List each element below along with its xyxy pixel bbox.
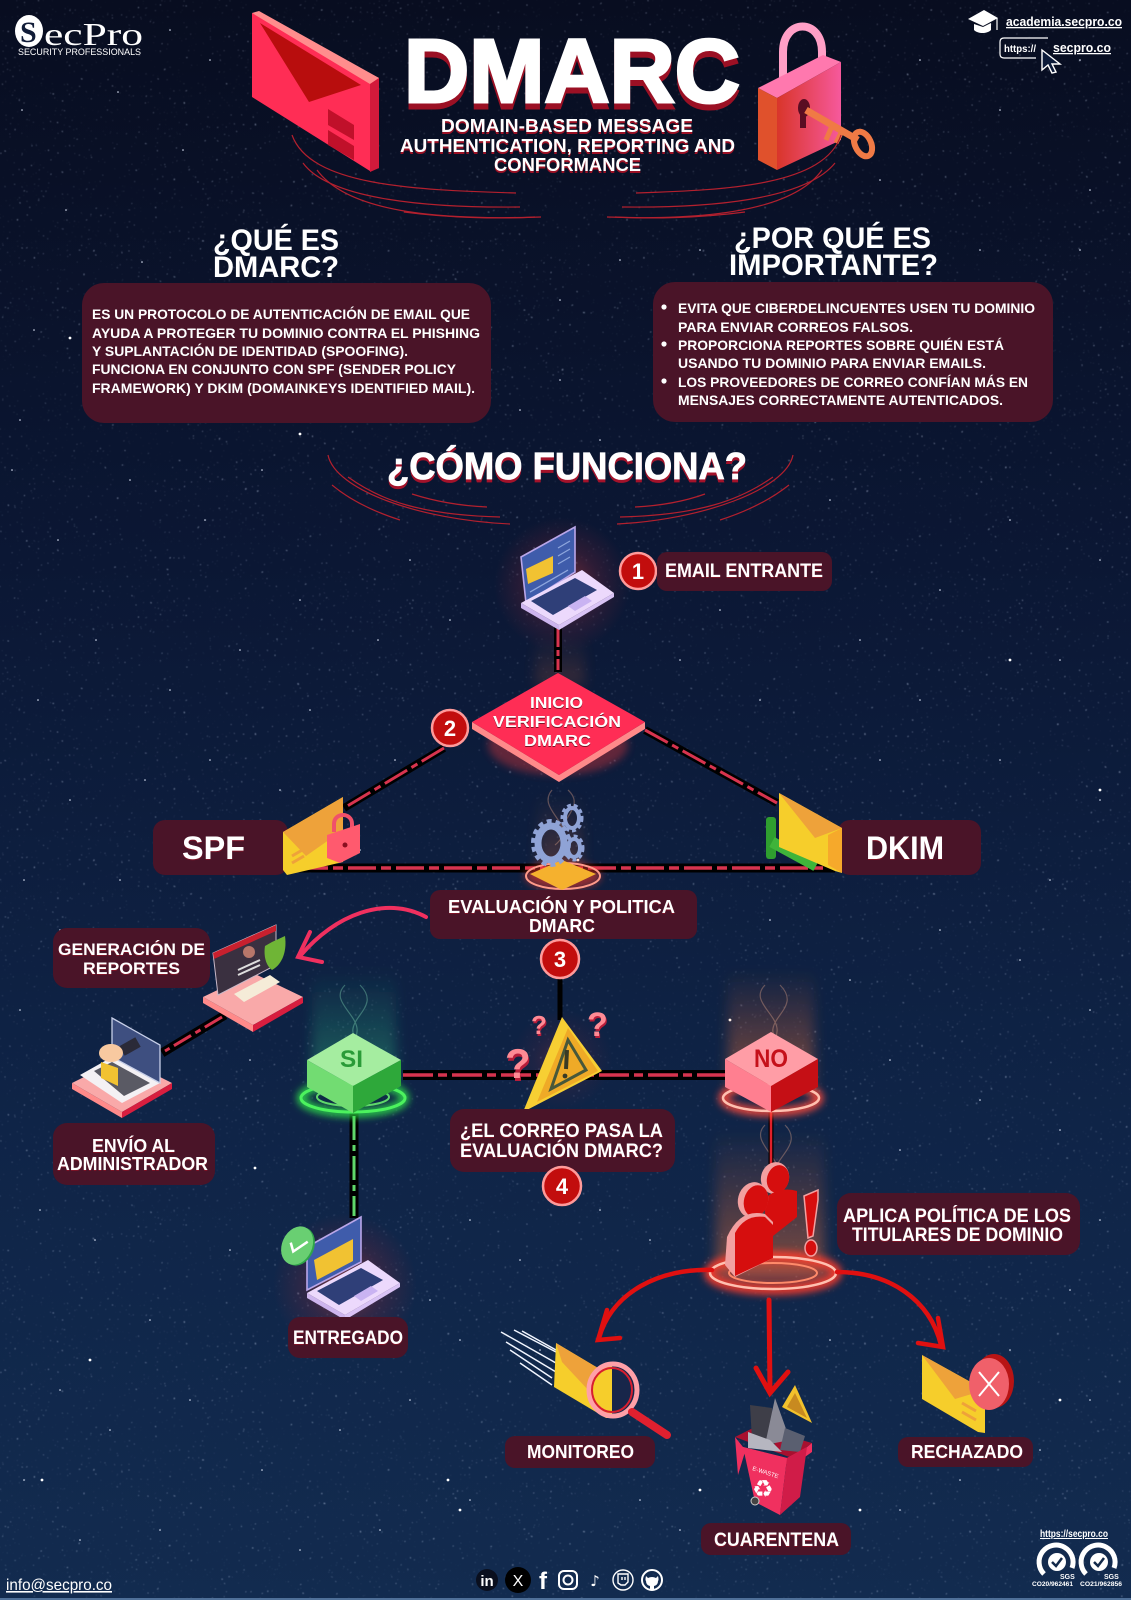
bullets — [661, 304, 667, 384]
heading: por que es importante — [729, 221, 938, 282]
glows — [273, 517, 824, 1357]
panel text: LOS PROVEEDORES DE CORREO CONFÍAN MÁS EN — [678, 374, 1028, 390]
panel text: MENSAJES CORRECTAMENTE AUTENTICADOS. — [678, 392, 1003, 408]
icon: x: X — [513, 1573, 524, 1590]
arrow: to report — [298, 908, 426, 962]
icon: quarantine bin — [735, 1385, 812, 1515]
connector: no to policy — [768, 1112, 774, 1170]
icon: instagram — [559, 1571, 577, 1589]
icon: cursor — [1042, 50, 1060, 73]
panel: por que es importante — [653, 282, 1053, 422]
panel text: PARA ENVIAR CORREOS FALSOS. — [678, 319, 913, 335]
heading: que es dmarc — [213, 223, 339, 284]
link box: https: https:// — [1004, 43, 1036, 55]
link: https secpro: https://secpro.co — [1040, 1529, 1108, 1540]
panel text: PROPORCIONA REPORTES SOBRE QUIÉN ESTÁ — [678, 337, 1004, 353]
icon: rejected envelope — [922, 1354, 1014, 1433]
badge 4 — [543, 1167, 581, 1205]
panel text: USANDO TU DOMINIO PARA ENVIAR EMAILS. — [678, 355, 986, 371]
label: aplica politica — [837, 1193, 1080, 1255]
label: cuarentena — [701, 1523, 851, 1555]
badge 3 — [541, 940, 579, 978]
logo tagline: SECURITY PROFESSIONALS — [18, 47, 141, 58]
heading: como funciona: ¿CÓMO FUNCIONA? — [387, 444, 747, 488]
icon: si cube: SI — [340, 1046, 363, 1073]
logo: SecPro — [15, 15, 143, 58]
icon: linkedin — [476, 1569, 498, 1591]
connector: laptop to diamond — [554, 625, 562, 672]
label text: GENERACIÓN DE — [58, 940, 205, 959]
label text: ENVÍO AL — [92, 1135, 175, 1156]
seal 2: SGS — [1104, 1574, 1119, 1581]
panel text: FRAMEWORK) Y DKIM (DOMAINKEYS IDENTIFIED MAIL). — [92, 380, 475, 396]
heading line 2: DMARC? — [213, 251, 339, 284]
label: evaluacion y politica — [430, 890, 697, 939]
icon: delivered laptop — [307, 1217, 400, 1320]
badge 4: 4 — [556, 1174, 569, 1199]
label text — [448, 896, 675, 936]
footer email: info@secpro.co — [6, 1577, 112, 1594]
logo wordmark: ecPro — [44, 16, 143, 52]
connector: diamond to dkim — [645, 730, 777, 803]
seal 1: SGS — [1060, 1574, 1075, 1581]
panel text: FUNCIONA EN CONJUNTO CON SPF (SENDER POLICY — [92, 361, 457, 377]
label: spf: SPF — [182, 830, 245, 866]
label: email entrante — [657, 552, 832, 591]
panel text — [92, 305, 480, 396]
icon: warning with question marks — [505, 1006, 608, 1112]
icon: x — [505, 1567, 531, 1593]
icon: incoming laptop — [521, 527, 614, 630]
diamond text — [493, 695, 621, 750]
label: cuarentena: CUARENTENA — [714, 1530, 839, 1551]
connector: si to delivered — [350, 1113, 358, 1218]
panel text: AYUDA A PROTEGER TU DOMINIO CONTRA EL PHISHING — [92, 325, 480, 341]
label: email entrante: EMAIL ENTRANTE — [665, 561, 823, 582]
icon: facebook: f — [539, 1568, 548, 1595]
icon: domain owners — [709, 1159, 837, 1290]
icon: check badge — [275, 1221, 321, 1271]
subtitle line 3: CONFORMANCE — [494, 155, 641, 175]
diamond text: VERIFICACIÓN — [493, 712, 621, 731]
icon: si cube — [301, 1033, 405, 1113]
diamond text: INICIO — [530, 695, 583, 712]
icon: linkedin: in — [480, 1573, 494, 1590]
label text — [460, 1121, 663, 1162]
swirl wisps — [340, 790, 791, 1195]
question marks — [505, 1006, 608, 1087]
label text: REPORTES — [83, 959, 180, 978]
label text: APLICA POLÍTICA DE LOS — [843, 1205, 1071, 1227]
connector: spf to dkim — [289, 864, 835, 872]
logo mark: S — [20, 16, 37, 49]
label: dkim — [838, 820, 981, 875]
heading line 1: ¿QUÉ ES — [213, 223, 339, 257]
label text: EVALUACIÓN DMARC? — [460, 1140, 663, 1162]
label text — [57, 1135, 208, 1174]
icon: padlock with key — [758, 26, 876, 170]
seal 2: CO21/962856 — [1080, 1582, 1123, 1588]
icon: github — [642, 1570, 662, 1590]
heading line 1: ¿POR QUÉ ES — [734, 221, 931, 255]
question marks: ? — [587, 1006, 608, 1044]
diamond: inicio verificacion dmarc — [472, 673, 645, 782]
icon: gears — [525, 805, 601, 890]
label text: EVALUACIÓN Y POLITICA — [448, 896, 675, 917]
icon: quarantine bin: E-WASTE — [751, 1466, 779, 1480]
badge 1 — [620, 553, 656, 589]
label: entregado: ENTREGADO — [293, 1328, 403, 1349]
icon: quarantine bin: ♻ — [752, 1475, 774, 1503]
label text: DMARC — [529, 916, 595, 936]
label: monitoreo: MONITOREO — [527, 1442, 634, 1462]
social icons — [476, 1567, 662, 1595]
seal 2 — [1080, 1545, 1123, 1588]
decorative arcs under title — [292, 135, 841, 218]
label text — [58, 940, 205, 978]
label text: TITULARES DE DOMINIO — [852, 1225, 1063, 1246]
seal 1: CO20/962461 — [1032, 1582, 1074, 1588]
question marks: ? — [531, 1010, 547, 1040]
label: dkim: DKIM — [866, 830, 944, 866]
subtitle — [400, 116, 735, 175]
arrow: to rechazado — [837, 1272, 943, 1347]
badge 1: 1 — [632, 559, 644, 584]
label text: ¿EL CORREO PASA LA — [460, 1121, 663, 1142]
label: el correo pasa — [450, 1109, 675, 1172]
panel text: EVITA QUE CIBERDELINCUENTES USEN TU DOMINIO — [678, 300, 1035, 316]
badge 2 — [432, 710, 468, 746]
link box: https — [1000, 38, 1048, 58]
icon: no cube: NO — [754, 1045, 788, 1073]
panel: que es dmarc — [82, 283, 491, 423]
heading line 2: IMPORTANTE? — [729, 249, 938, 282]
connector: diamond to spf — [344, 748, 444, 808]
icon: admin laptop — [72, 1018, 172, 1118]
icon: twitch — [613, 1570, 633, 1590]
seal 1 — [1032, 1545, 1075, 1588]
decorative arcs under heading — [328, 455, 793, 524]
panel text: Y SUPLANTACIÓN DE IDENTIDAD (SPOOFING). — [92, 342, 408, 359]
icon: spf envelope with lock — [283, 797, 360, 875]
icon: dkim envelope with key — [766, 793, 842, 873]
link: secpro.co: secpro.co — [1053, 41, 1111, 55]
panel text — [678, 300, 1035, 408]
label: generacion de reportes — [53, 928, 210, 988]
connector: report to admin — [162, 1015, 225, 1053]
icon: report laptop — [203, 925, 303, 1032]
label: spf — [153, 820, 288, 875]
label text — [843, 1205, 1071, 1246]
label: rechazado — [898, 1437, 1033, 1467]
certifications — [1032, 1529, 1123, 1588]
icon: red envelope — [252, 11, 379, 172]
icon: graduation cap — [968, 10, 998, 33]
label: envio al administrador — [53, 1123, 215, 1185]
label: rechazado: RECHAZADO — [911, 1442, 1023, 1462]
badge 3: 3 — [554, 947, 566, 972]
question marks: ? — [505, 1040, 531, 1087]
label: entregado — [288, 1317, 408, 1358]
panel text: ES UN PROTOCOLO DE AUTENTICACIÓN DE EMAIL QUE — [92, 305, 470, 322]
arrow: to monitoreo — [598, 1270, 712, 1340]
title: DMARC: DMARC — [404, 22, 740, 122]
icon: no cube — [723, 1032, 819, 1112]
subtitle line 2: AUTHENTICATION, REPORTING AND — [400, 136, 735, 156]
diamond text: DMARC — [524, 733, 592, 750]
arrow: to cuarentena — [756, 1300, 788, 1393]
link: academia.secpro.co: academia.secpro.co — [1006, 14, 1122, 29]
badge 2: 2 — [444, 716, 456, 741]
icon: tiktok: ♪ — [590, 1572, 600, 1590]
connector: si to no — [403, 1070, 725, 1080]
label text: ADMINISTRADOR — [57, 1154, 208, 1174]
icon: monitoreo envelope with magnifier — [501, 1330, 667, 1435]
connector: badge 3 to warning — [558, 978, 562, 1020]
label: monitoreo — [505, 1436, 655, 1468]
subtitle line 1: DOMAIN-BASED MESSAGE — [441, 116, 693, 136]
